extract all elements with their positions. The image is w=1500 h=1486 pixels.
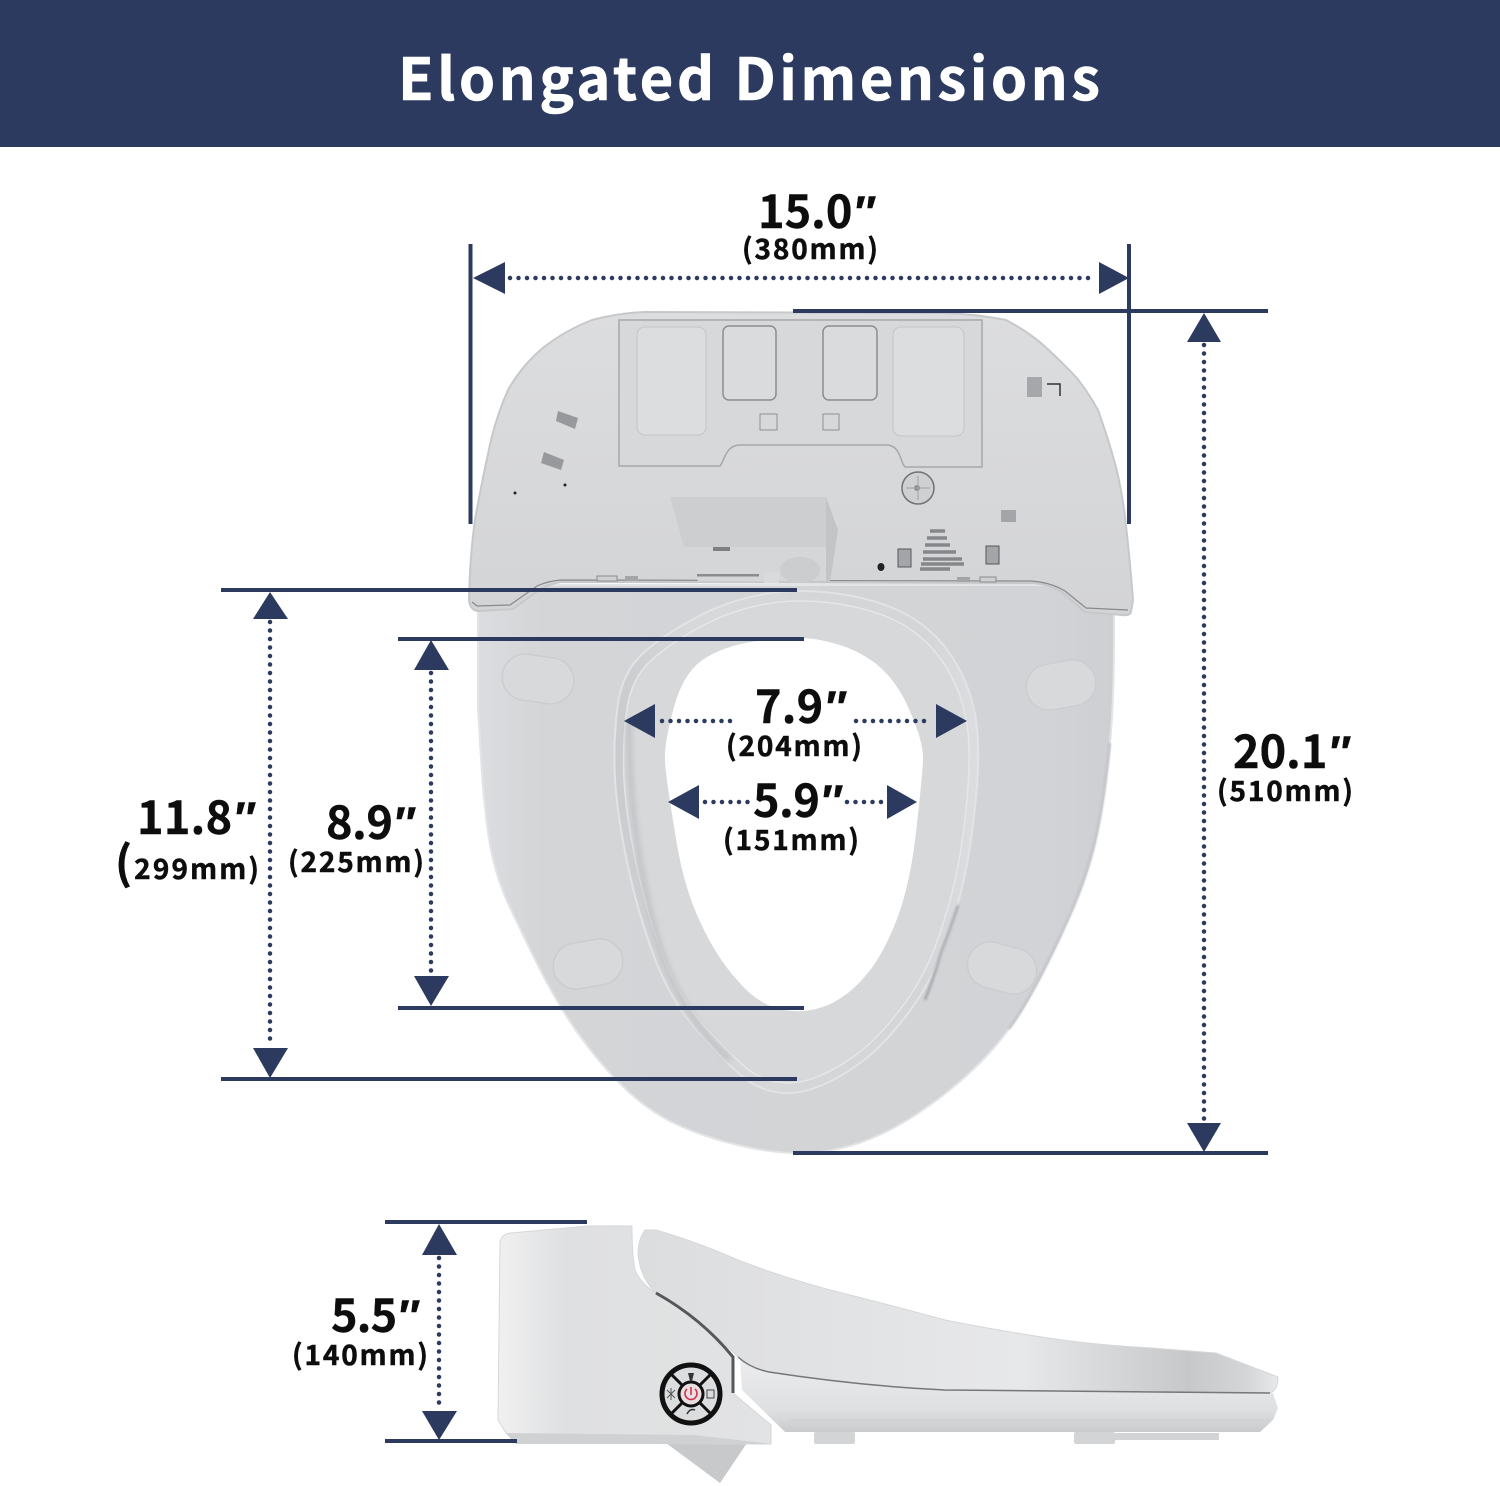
dimension: width 15.0 bbox=[470, 176, 1129, 524]
dimension: opening 7.9: 7.9″ bbox=[755, 671, 847, 736]
side tank bbox=[498, 1226, 771, 1444]
dimension: opening 8.9: (225mm) bbox=[288, 841, 424, 881]
pocket 2 bbox=[723, 326, 776, 400]
seat lid bbox=[638, 1230, 1278, 1393]
header banner bbox=[0, 0, 1500, 147]
toilet seat top view bbox=[469, 312, 1133, 1153]
dimension: opening 8.9 bbox=[288, 639, 804, 1008]
bumper top right bbox=[1023, 656, 1099, 714]
tank body bbox=[469, 312, 1133, 615]
centre box bbox=[670, 497, 838, 583]
dimension: length 20.1 bbox=[793, 311, 1353, 1153]
lower seat mid line bbox=[790, 1419, 1270, 1421]
pin holes bbox=[514, 484, 884, 571]
bottom clips bbox=[597, 576, 996, 582]
tank base band bbox=[506, 1433, 771, 1444]
small squares bbox=[760, 414, 839, 430]
pocket 1 bbox=[637, 327, 706, 435]
dimension: width 15.0: 15.0″ bbox=[758, 176, 876, 241]
ring inner ridge bbox=[624, 601, 969, 1083]
ring left shading bbox=[629, 720, 730, 1060]
dimension: height 5.5: (140mm) bbox=[292, 1334, 428, 1374]
tank bottom rim line bbox=[472, 580, 1128, 610]
dimension: opening 7.9: (204mm) bbox=[726, 725, 862, 765]
screw knob bbox=[902, 472, 934, 504]
hinge gap bbox=[656, 1293, 733, 1393]
bumper top left bbox=[499, 651, 577, 707]
lower seat bbox=[740, 1358, 1278, 1432]
bottom bracket bbox=[666, 1443, 747, 1483]
pocket 4 bbox=[893, 327, 964, 436]
bumper bottom left bbox=[550, 935, 626, 993]
ring dark crease bbox=[925, 905, 958, 1000]
dimension: seat 11.8: 11.8″ bbox=[137, 782, 256, 847]
dimension: opening 7.9 bbox=[624, 671, 967, 765]
feet bbox=[814, 1432, 1219, 1444]
dimension: opening 8.9: 8.9″ bbox=[326, 787, 416, 852]
dimension: height 5.5 bbox=[292, 1222, 587, 1441]
side view of seat bbox=[498, 1226, 1278, 1483]
control dial bbox=[662, 1365, 720, 1423]
seat right edge shading bbox=[1009, 743, 1110, 1029]
title: Elongated Dimensions bbox=[398, 33, 1100, 117]
power icon bbox=[685, 1387, 697, 1399]
dimension: seat 11.8: (299mm) bbox=[115, 827, 259, 892]
seam line bbox=[738, 1357, 1270, 1393]
seat body bbox=[478, 585, 1114, 1153]
dimension: opening 5.9: (151mm) bbox=[723, 819, 859, 859]
dimension: length 20.1: (510mm) bbox=[1217, 770, 1353, 810]
bumper bottom right bbox=[962, 937, 1042, 999]
dimension: height 5.5: 5.5″ bbox=[331, 1280, 420, 1345]
vent side clips bbox=[898, 510, 1016, 567]
dimension: seat 11.8 bbox=[115, 590, 797, 1079]
left slots bbox=[541, 411, 578, 470]
seat opening bbox=[665, 638, 923, 1011]
back panel bbox=[619, 320, 982, 467]
dimension: opening 5.9 bbox=[668, 765, 917, 859]
dimension: opening 5.9: 5.9″ bbox=[753, 765, 843, 830]
seat ring bbox=[614, 591, 978, 1093]
dimension: width 15.0: (380mm) bbox=[742, 228, 878, 268]
right clip bbox=[1027, 377, 1060, 397]
vent slots bbox=[920, 531, 964, 569]
dimension: length 20.1: 20.1″ bbox=[1233, 716, 1351, 781]
pocket 3 bbox=[823, 326, 877, 400]
